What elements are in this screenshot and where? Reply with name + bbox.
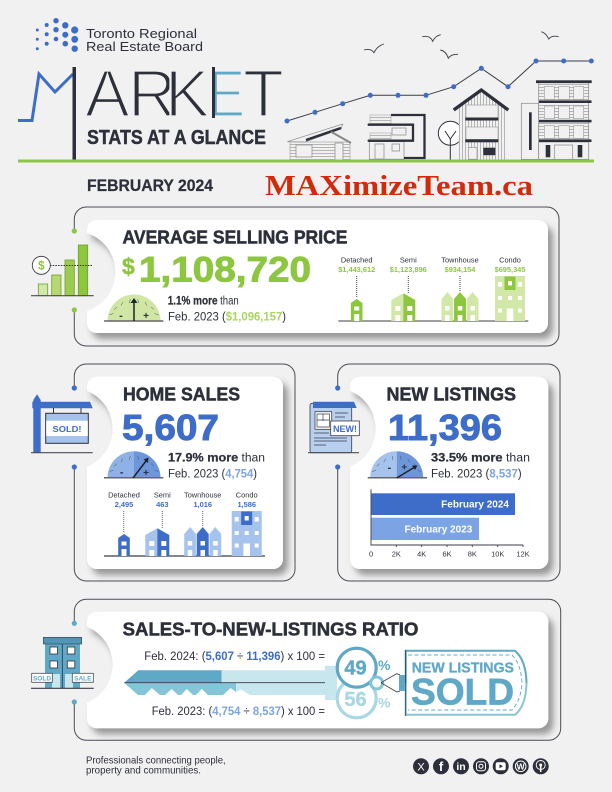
gauge xyxy=(104,294,163,322)
ratio 49%: 49 xyxy=(344,658,367,680)
title: MARKET: T xyxy=(243,56,284,132)
key graphic xyxy=(124,648,400,718)
semi xyxy=(390,256,427,321)
bar chart: 8K xyxy=(468,550,477,559)
townhouse: Townhouse xyxy=(441,256,479,265)
big number: 11,396 xyxy=(388,407,502,448)
condo: Condo xyxy=(236,491,258,500)
icon: rising bars with dollar xyxy=(31,245,94,296)
logo: Toronto Regional Real Estate Board xyxy=(36,18,203,54)
condo xyxy=(495,256,525,321)
semi: Semi xyxy=(154,491,171,500)
detached: Detached xyxy=(341,256,373,265)
icon: rising bars with dollar: $ xyxy=(38,258,45,272)
townhouse xyxy=(184,491,221,556)
big number: 5,607 xyxy=(122,407,219,448)
semi xyxy=(145,491,171,556)
semi: $1,123,896 xyxy=(390,265,427,274)
icon: new listing document xyxy=(308,402,359,453)
green ground line xyxy=(18,160,594,162)
change text xyxy=(431,451,530,481)
building type prices xyxy=(338,256,528,321)
panel: average selling price xyxy=(31,207,559,346)
change text: Feb. 2023 (8,537) xyxy=(431,469,522,481)
footer tagline: property and communities. xyxy=(86,765,201,776)
logo: Toronto Regional Real Estate Board: Real Estate Board xyxy=(86,39,203,54)
trend line chart with dots xyxy=(284,58,594,124)
icon: new listing document: NEW! xyxy=(333,424,357,435)
date heading: FEBRUARY 2024 xyxy=(87,177,214,195)
detached xyxy=(338,256,375,321)
change text xyxy=(168,451,265,481)
social icons: in xyxy=(456,761,466,773)
icon: apartment with sold and sale signs: SALE xyxy=(74,676,92,682)
condo: 1,586 xyxy=(237,500,256,509)
title: MARKET: ARK xyxy=(85,56,210,132)
title: MARKET xyxy=(18,56,284,162)
bar chart: 6K xyxy=(442,550,452,559)
heading: SALES-TO-NEW-LISTINGS RATIO xyxy=(123,620,418,640)
gauge: - xyxy=(119,310,123,322)
gauge: + xyxy=(143,311,149,322)
footer tagline: Professionals connecting people, xyxy=(86,755,226,766)
bar chart: February 2024 xyxy=(441,500,509,511)
website banner text: MAXimizeTeam.ca xyxy=(265,170,534,202)
icon: sold sign xyxy=(31,394,93,453)
heading: NEW LISTINGS xyxy=(386,385,516,405)
tree xyxy=(438,121,462,160)
heading: AVERAGE SELLING PRICE xyxy=(122,227,348,247)
semi: Semi xyxy=(400,256,417,265)
icon: apartment with sold and sale signs xyxy=(31,637,94,688)
bar chart: February 2023 xyxy=(404,524,473,535)
change text: 1.1% more than xyxy=(168,293,239,307)
ratio 49%: % xyxy=(378,657,391,673)
ratio 56% xyxy=(344,689,391,711)
house 3 xyxy=(454,90,508,160)
detached: $1,443,612 xyxy=(338,265,375,274)
footer tagline xyxy=(86,755,226,776)
ratio 56%: 56 xyxy=(344,689,367,711)
semi: 463 xyxy=(156,500,168,509)
townhouse xyxy=(441,256,479,321)
house illustrations xyxy=(287,80,592,160)
bar chart: 2K xyxy=(392,550,401,559)
house 2 xyxy=(368,115,424,159)
panel: home sales xyxy=(31,364,295,581)
tag: new listings sold: SOLD xyxy=(411,671,514,712)
bar chart: 4K xyxy=(417,550,426,559)
big price: 1,108,720 xyxy=(139,251,311,290)
big price: $ xyxy=(122,254,135,280)
tag: new listings sold xyxy=(399,650,526,716)
change text: 33.5% more than xyxy=(431,451,530,465)
formula 2023: Feb. 2023: (4,754 ÷ 8,537) x 100 = xyxy=(152,706,325,718)
condo: $695,345 xyxy=(495,265,525,274)
gauge: - xyxy=(120,466,124,478)
bar chart: 0 xyxy=(369,550,373,559)
heading: HOME SALES xyxy=(123,385,240,405)
apartment building xyxy=(521,80,592,159)
panel: sales-to-new-listings ratio xyxy=(31,599,561,740)
gauge: + xyxy=(143,468,149,479)
subtitle: STATS AT A GLANCE xyxy=(87,127,266,149)
icon: apartment with sold and sale signs: SOLD xyxy=(33,676,51,682)
gauge xyxy=(368,451,427,478)
change text: Feb. 2023 ($1,096,157) xyxy=(168,312,286,324)
icon: sold sign: SOLD! xyxy=(52,424,82,434)
panel: new listings xyxy=(308,364,560,581)
bar chart xyxy=(369,489,530,559)
house 1 xyxy=(287,124,351,160)
condo: Condo xyxy=(499,256,521,265)
social icons: W xyxy=(517,762,526,772)
social icons: X xyxy=(417,761,425,773)
townhouse: $934,154 xyxy=(445,265,476,274)
social icons: f xyxy=(439,759,444,774)
ratio 49% xyxy=(344,657,391,680)
social icons xyxy=(413,758,549,774)
change text: 17.9% more than xyxy=(168,451,265,465)
ratio 56%: % xyxy=(378,695,391,711)
logo: Toronto Regional Real Estate Board: Toronto Regional xyxy=(86,26,197,41)
formula 2024: Feb. 2024: (5,607 ÷ 11,396) x 100 = xyxy=(144,651,325,663)
gauge xyxy=(104,451,163,479)
townhouse: 1,016 xyxy=(193,500,212,509)
detached: 2,495 xyxy=(115,500,133,509)
gauge: + xyxy=(401,462,407,474)
title: MARKET: E xyxy=(208,57,245,132)
tag: new listings sold: NEW LISTINGS xyxy=(412,661,514,677)
detached xyxy=(108,491,140,556)
change text xyxy=(168,293,286,324)
detached: Detached xyxy=(108,491,140,500)
change text: Feb. 2023 (4,754) xyxy=(168,469,257,481)
bar chart: 12K xyxy=(516,550,530,559)
townhouse: Townhouse xyxy=(184,491,221,500)
gauge: - xyxy=(387,462,391,474)
condo xyxy=(232,491,262,556)
bar chart: 10K xyxy=(491,550,504,559)
building type sales xyxy=(104,491,265,556)
birds xyxy=(364,32,559,58)
